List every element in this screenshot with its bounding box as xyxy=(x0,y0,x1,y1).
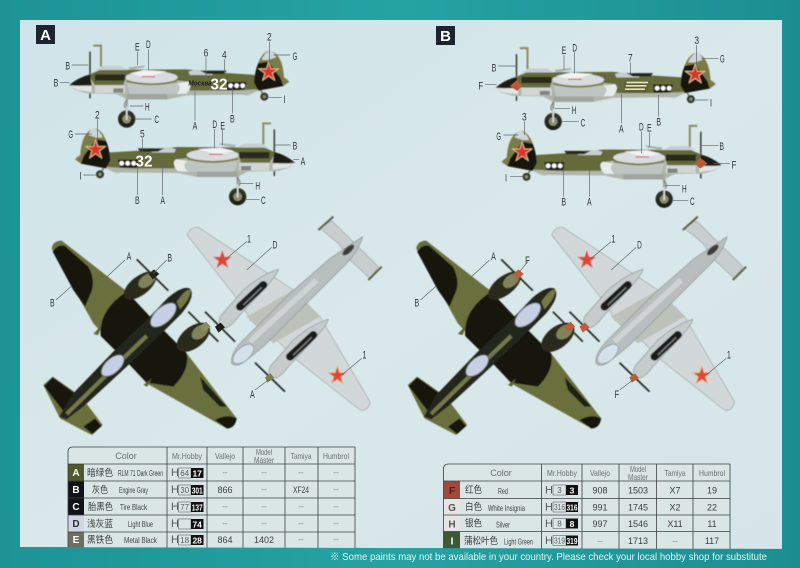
badge: scheme B: B xyxy=(440,28,451,45)
table B: paint colours F to I: 319 xyxy=(566,536,578,546)
table B: paint colours F to I: H xyxy=(545,502,553,514)
callouts: side view A upper: G xyxy=(293,51,297,63)
callouts: side view A lower: 2 xyxy=(95,109,100,121)
side view B: left-facing aircraft xyxy=(496,47,716,130)
table B: paint colours F to I: 1503 xyxy=(628,486,648,496)
callouts: side view B upper: E xyxy=(562,45,566,57)
table A: paint colours A to E: 胎黑色 xyxy=(88,501,113,513)
callouts: side view B upper: 3 xyxy=(694,35,699,47)
table B: paint colours F to I: Silver xyxy=(496,520,510,530)
callouts: side view B upper: F xyxy=(478,81,483,93)
side view A: left-facing aircraft: Москва xyxy=(188,78,212,87)
top view B: camouflaged upper surface xyxy=(408,241,601,435)
table A: paint colours A to E: 17 xyxy=(192,468,202,478)
side view A: left-facing aircraft xyxy=(69,45,289,128)
bottom teal strip xyxy=(0,547,800,568)
table B: paint colours F to I: 1745 xyxy=(628,502,648,512)
table A: paint colours A to E: 137 xyxy=(192,502,203,512)
table A: paint colours A to E: B xyxy=(72,485,80,496)
table A: paint colours A to E: C xyxy=(72,502,80,513)
top view B: camouflaged upper surface: B xyxy=(414,298,419,310)
table A: paint colours A to E: Vallejo xyxy=(215,451,235,461)
side view A: right-facing aircraft xyxy=(75,122,295,205)
callouts: side view A lower: C xyxy=(261,195,266,207)
side view A: right-facing aircraft: 32 xyxy=(135,154,153,171)
table A: paint colours A to E: -- xyxy=(222,519,228,528)
callouts: side view B lower: F xyxy=(732,159,737,171)
callouts: side view A upper xyxy=(54,32,297,133)
table B: paint colours F to I: 991 xyxy=(592,502,608,512)
table A: paint colours A to E: -- xyxy=(222,468,228,477)
callouts: side view A lower: D xyxy=(212,119,217,131)
table A: paint colours A to E: 18 xyxy=(180,536,190,545)
table A: paint colours A to E: D xyxy=(72,519,80,530)
table B: paint colours F to I: 8 xyxy=(557,520,562,528)
callouts: side view A upper: 6 xyxy=(204,47,208,59)
table A: paint colours A to E: -- xyxy=(261,485,267,494)
table A: paint colours A to E: Tamiya xyxy=(290,451,312,461)
table B: paint colours F to I: Red xyxy=(498,487,508,496)
table A: paint colours A to E: 暗绿色 xyxy=(87,467,113,479)
table A: paint colours A to E: -- xyxy=(298,468,304,477)
top view B: camouflaged upper surface: F xyxy=(525,255,530,267)
table A: paint colours A to E: 30 xyxy=(180,486,190,495)
table B: paint colours F to I xyxy=(443,464,730,549)
badge: scheme A: A xyxy=(40,27,51,44)
table B: paint colours F to I: H xyxy=(448,520,456,530)
table A: paint colours A to E: 1402 xyxy=(254,535,274,545)
table B: paint colours F to I: -- xyxy=(672,536,678,546)
callouts: side view B lower: A xyxy=(587,197,592,209)
table B: paint colours F to I: H xyxy=(545,535,553,547)
table B: paint colours F to I: Humbrol xyxy=(699,468,725,478)
bottom view B: silver underside: D xyxy=(637,239,642,251)
bottom view A: silver underside: 1 xyxy=(362,349,366,361)
callouts: side view B lower: B xyxy=(719,141,724,153)
table A: paint colours A to E: Metal Black xyxy=(124,536,158,545)
table B: paint colours F to I: 蒲松叶色 xyxy=(464,535,498,547)
table B: paint colours F to I: I xyxy=(451,536,454,548)
table A: paint colours A to E: -- xyxy=(333,485,339,494)
callouts: side view B upper: H xyxy=(572,105,576,117)
callouts: side view A lower: A xyxy=(160,195,166,207)
table A: paint colours A to E: 864 xyxy=(217,535,233,545)
table A: paint colours A to E: -- xyxy=(222,502,228,511)
badge: scheme A xyxy=(36,25,55,44)
table A: paint colours A to E xyxy=(68,447,355,548)
table B: paint colours F to I: 319 xyxy=(554,536,565,546)
table A: paint colours A to E: -- xyxy=(333,535,339,544)
callouts: side view A upper: I xyxy=(283,94,285,106)
callouts: side view A upper: E xyxy=(135,42,140,54)
callouts: side view A upper: B xyxy=(54,77,58,89)
callouts: side view B upper: G xyxy=(720,53,725,65)
footnote: ※ Some paints may not be available in your country. Please check your local hobby shop for substitute xyxy=(330,551,767,563)
table A: paint colours A to E: 灰色 xyxy=(92,484,108,496)
table A: paint colours A to E: Engine Gray xyxy=(119,486,148,495)
callouts: side view B upper: I xyxy=(710,97,712,109)
table B: paint colours F to I: 银色 xyxy=(465,518,482,530)
callouts: side view B lower: 3 xyxy=(522,112,527,124)
table A: paint colours A to E: -- xyxy=(333,502,339,511)
top view A: camouflaged upper surface xyxy=(43,241,237,435)
bottom view B: silver underside: F xyxy=(614,389,620,401)
table A: paint colours A to E: Humbrol xyxy=(323,451,349,461)
callouts: side view B lower: C xyxy=(690,196,695,208)
callouts: side view B lower: E xyxy=(647,122,652,134)
table B: paint colours F to I: G xyxy=(448,503,456,514)
table B: paint colours F to I: Color xyxy=(490,468,512,478)
callouts: side view A lower: I xyxy=(79,171,81,183)
callouts: side view B upper xyxy=(478,35,725,135)
table A: paint colours A to E: Tire Black xyxy=(120,503,148,512)
table A: paint colours A to E: -- xyxy=(261,519,267,528)
callouts: side view B lower: H xyxy=(682,183,687,195)
table A: paint colours A to E: RLM 71 Dark Green xyxy=(118,469,163,478)
bottom view B: silver underside: 1 xyxy=(727,349,731,361)
table B: paint colours F to I: 316 xyxy=(554,503,565,512)
callouts: side view A upper: A xyxy=(193,121,198,133)
callouts: side view A upper: H xyxy=(145,102,150,114)
callouts: side view A lower: B xyxy=(135,195,140,207)
table B: paint colours F to I: F xyxy=(449,486,455,497)
side view B: right-facing aircraft xyxy=(501,125,721,208)
table A: paint colours A to E: 74 xyxy=(192,520,202,530)
table B: paint colours F to I: -- xyxy=(597,536,603,546)
callouts: side view B lower xyxy=(496,112,737,209)
table B: paint colours F to I: 11 xyxy=(707,519,717,529)
table A: paint colours A to E: H xyxy=(171,484,179,496)
table B: paint colours F to I: Tamiya xyxy=(664,468,686,478)
table A: paint colours A to E: -- xyxy=(298,535,304,544)
table A: paint colours A to E: H xyxy=(171,518,179,530)
callouts: side view A lower xyxy=(68,109,306,207)
table B: paint colours F to I: 8 xyxy=(570,519,575,529)
callouts: side view A lower: B xyxy=(293,141,297,153)
table A: paint colours A to E: -- xyxy=(333,468,339,477)
side view A: left-facing aircraft: 32 xyxy=(210,76,228,93)
callouts: side view B lower: D xyxy=(639,122,644,134)
callouts: side view A lower: 5 xyxy=(140,128,145,140)
table A: paint colours A to E: H xyxy=(171,501,179,513)
table A: paint colours A to E: 866 xyxy=(217,485,233,495)
callouts: side view B lower: I xyxy=(505,172,507,184)
table A: paint colours A to E: Color xyxy=(115,451,137,461)
table A: paint colours A to E: Master xyxy=(254,455,274,465)
table A: paint colours A to E: 浅灰蓝 xyxy=(87,518,113,530)
callouts: side view A lower: G xyxy=(68,129,73,141)
table A: paint colours A to E: 301 xyxy=(192,486,203,496)
table A: paint colours A to E: H xyxy=(171,534,179,546)
bottom view B: silver underside xyxy=(552,217,746,410)
callouts: side view A upper: C xyxy=(154,114,159,126)
callouts: side view A upper: B xyxy=(65,61,70,73)
table A: paint colours A to E: 64 xyxy=(180,469,190,478)
callouts: side view B lower: B xyxy=(561,197,566,209)
table A: paint colours A to E: H xyxy=(171,467,179,479)
table B: paint colours F to I: Mr.Hobby xyxy=(547,468,578,478)
table A: paint colours A to E: Light Blue xyxy=(128,520,153,529)
table A: paint colours A to E: 28 xyxy=(192,536,202,546)
badge: scheme B xyxy=(436,26,455,45)
table B: paint colours F to I: 316 xyxy=(566,502,578,512)
top view B: camouflaged upper surface: A xyxy=(491,251,496,263)
table B: paint colours F to I: 3 xyxy=(557,486,562,495)
table A: paint colours A to E: Model xyxy=(256,447,272,457)
top view A: camouflaged upper surface: B xyxy=(167,253,172,265)
callouts: side view A lower: H xyxy=(255,181,260,193)
table B: paint colours F to I: 117 xyxy=(705,536,719,546)
table B: paint colours F to I: 908 xyxy=(592,486,608,496)
table A: paint colours A to E: E xyxy=(73,535,80,546)
table B: paint colours F to I: 3 xyxy=(570,486,575,496)
table B: paint colours F to I: 997 xyxy=(592,519,608,529)
table B: paint colours F to I: X11 xyxy=(667,519,683,529)
table B: paint colours F to I: Light Green xyxy=(504,538,533,546)
callouts: side view B upper: B xyxy=(492,62,496,74)
callouts: side view B upper: D xyxy=(572,42,577,54)
table A: paint colours A to E: -- xyxy=(333,519,339,528)
table B: paint colours F to I: Model xyxy=(630,464,646,474)
table B: paint colours F to I: H xyxy=(545,518,553,530)
table A: paint colours A to E: Mr.Hobby xyxy=(172,451,203,461)
bottom view A: silver underside: D xyxy=(273,239,278,251)
callouts: side view B upper: 7 xyxy=(628,52,633,64)
callouts: side view A lower: A xyxy=(301,156,306,168)
callouts: side view A upper: B xyxy=(230,113,235,125)
table B: paint colours F to I: 22 xyxy=(707,502,717,512)
table B: paint colours F to I: X2 xyxy=(669,502,681,512)
table B: paint colours F to I: 1713 xyxy=(628,536,648,546)
table B: paint colours F to I: Master xyxy=(628,472,648,482)
table B: paint colours F to I: 白色 xyxy=(465,501,482,513)
table B: paint colours F to I: X7 xyxy=(669,486,681,496)
table A: paint colours A to E: -- xyxy=(261,502,267,511)
table A: paint colours A to E: 77 xyxy=(180,503,190,512)
table B: paint colours F to I: 红色 xyxy=(465,484,482,496)
table A: paint colours A to E: -- xyxy=(298,519,304,528)
table B: paint colours F to I: H xyxy=(545,484,553,496)
table B: paint colours F to I: 1546 xyxy=(628,519,648,529)
table A: paint colours A to E: A xyxy=(72,468,80,479)
callouts: side view A upper: D xyxy=(146,39,151,51)
callouts: side view A upper: 2 xyxy=(267,32,272,44)
callouts: side view B upper: C xyxy=(581,117,586,129)
table A: paint colours A to E: 黑铁色 xyxy=(87,534,113,546)
table B: paint colours F to I: White Insignia xyxy=(488,504,525,513)
top view A: camouflaged upper surface: A xyxy=(127,251,132,263)
table B: paint colours F to I: 19 xyxy=(707,486,717,496)
bottom view A: silver underside xyxy=(187,217,382,410)
callouts: side view B upper: A xyxy=(619,123,624,135)
callouts: side view A lower: E xyxy=(220,120,225,132)
callouts: side view B upper: B xyxy=(656,117,661,129)
table B: paint colours F to I: Vallejo xyxy=(590,468,610,478)
bottom view B: silver underside: 1 xyxy=(611,233,616,245)
table A: paint colours A to E: XF24 xyxy=(293,485,309,495)
table A: paint colours A to E: -- xyxy=(298,502,304,511)
bottom view A: silver underside: 1 xyxy=(247,233,251,245)
bottom view A: silver underside: A xyxy=(250,389,255,401)
top view A: camouflaged upper surface: B xyxy=(50,298,55,310)
callouts: side view B lower: G xyxy=(496,131,501,143)
table A: paint colours A to E: -- xyxy=(261,468,267,477)
callouts: side view A upper: 4 xyxy=(222,49,227,61)
